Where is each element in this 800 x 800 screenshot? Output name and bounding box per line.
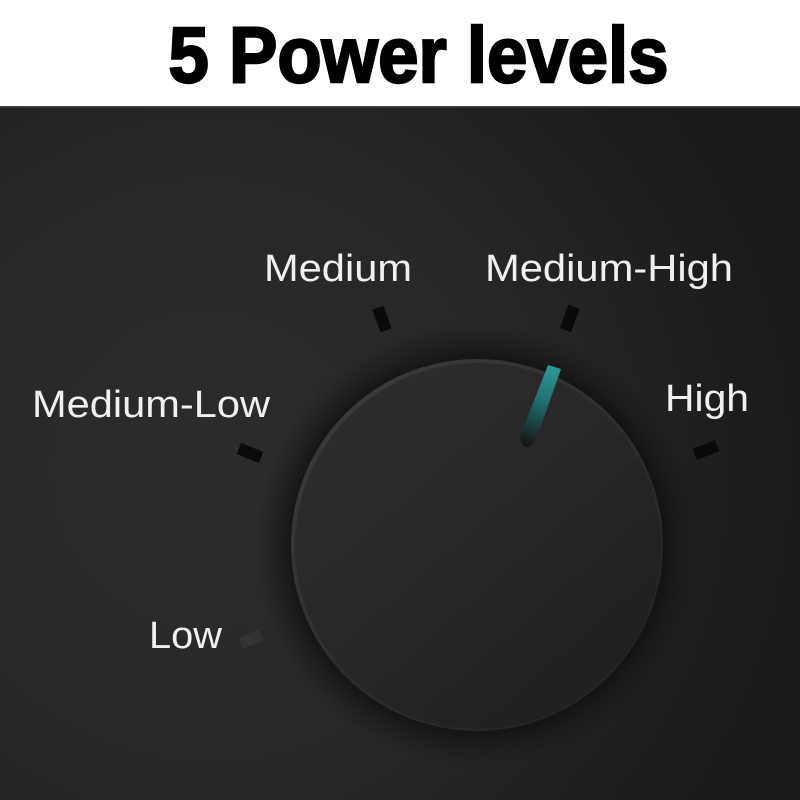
tick: Medium bbox=[372, 306, 392, 332]
title: 5 Power levels bbox=[168, 10, 668, 99]
tick: Low bbox=[239, 629, 263, 649]
knob bbox=[291, 359, 663, 731]
pointer bbox=[520, 365, 561, 447]
label: Medium-Low: Medium-Low bbox=[32, 384, 271, 426]
knob shadow bbox=[255, 323, 699, 767]
tick: High bbox=[693, 440, 719, 460]
label: High: High bbox=[665, 378, 749, 420]
label: Low: Low bbox=[149, 615, 223, 657]
tick: Medium-Low bbox=[237, 443, 263, 463]
label: Medium: Medium bbox=[264, 248, 412, 290]
tick: Medium-High bbox=[560, 305, 580, 332]
label: Medium-High: Medium-High bbox=[485, 248, 733, 290]
